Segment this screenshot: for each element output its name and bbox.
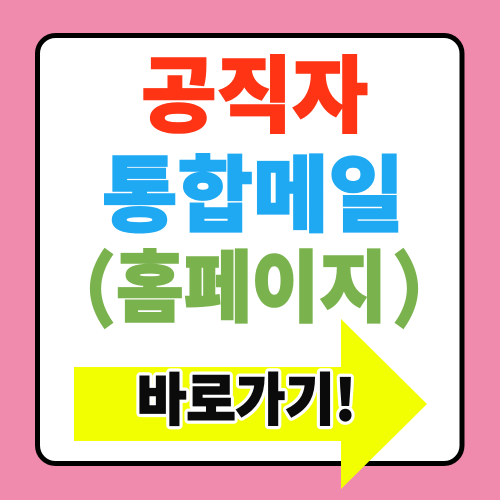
left parenthesis: [96, 251, 109, 326]
button label: 바로가기!: [137, 356, 356, 437]
title: 공직자: 공직자: [141, 29, 368, 149]
label outline: 바로가기!: [137, 356, 356, 437]
yellow arrow: [74, 319, 427, 489]
right parenthesis: [399, 251, 412, 326]
title: 홈페이지 with parentheses: [96, 226, 412, 338]
word: 홈페이지: 홈페이지: [116, 226, 387, 338]
white rounded card: [38, 36, 462, 464]
label fill: 바로가기!: [137, 356, 356, 437]
title: 통합메일: 통합메일: [102, 128, 404, 248]
